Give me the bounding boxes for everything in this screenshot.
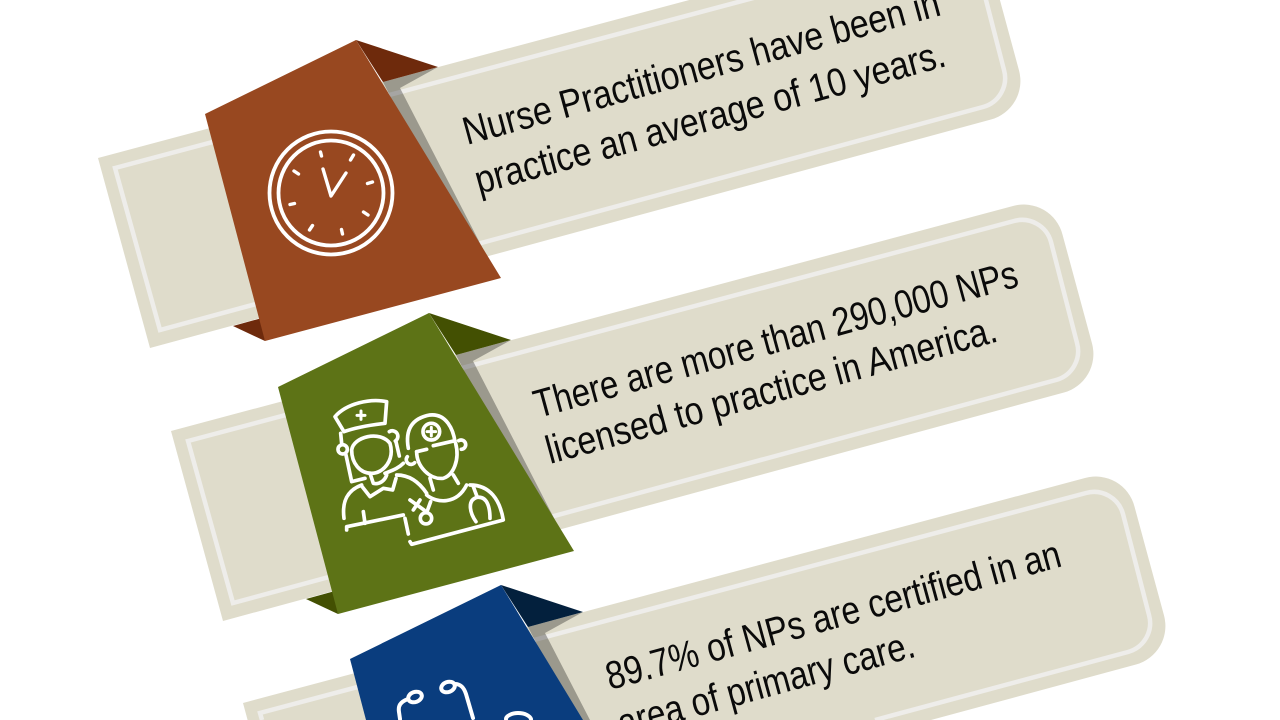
ribbon	[278, 313, 574, 614]
card inner outline	[188, 220, 1078, 603]
text: primary care certification	[601, 532, 1066, 720]
text: licensed NPs: licensed to practice in America.	[541, 307, 1002, 473]
panel: primary care certification	[243, 477, 1165, 720]
icon: nurses	[335, 401, 503, 544]
ribbon top fold	[429, 313, 511, 355]
ribbon bottom fold	[233, 318, 265, 341]
card inner outline	[115, 0, 1005, 330]
panel: licensed NPs	[171, 205, 1093, 621]
ribbon shadow	[456, 340, 555, 535]
ribbon	[205, 40, 501, 341]
ribbon top fold	[356, 40, 438, 82]
card background	[98, 0, 1020, 348]
text: licensed NPs: There are more than 290,000 NPs	[529, 252, 1023, 427]
panel: years in practice	[98, 0, 1020, 348]
card background	[171, 205, 1093, 621]
ribbon	[350, 585, 583, 720]
icon: clock	[270, 132, 392, 254]
ribbon shadow	[383, 67, 482, 262]
icon: stethoscope	[399, 680, 531, 719]
text: years in practice: practice an average of 10 years.	[470, 32, 950, 203]
card inner outline	[260, 492, 1150, 720]
ribbon bottom fold	[306, 591, 338, 614]
text: primary care certification: 89.7% of NPs are certified in an	[601, 532, 1066, 699]
ribbon top fold	[501, 585, 583, 627]
card background	[243, 477, 1165, 720]
ribbon shadow	[528, 612, 590, 720]
